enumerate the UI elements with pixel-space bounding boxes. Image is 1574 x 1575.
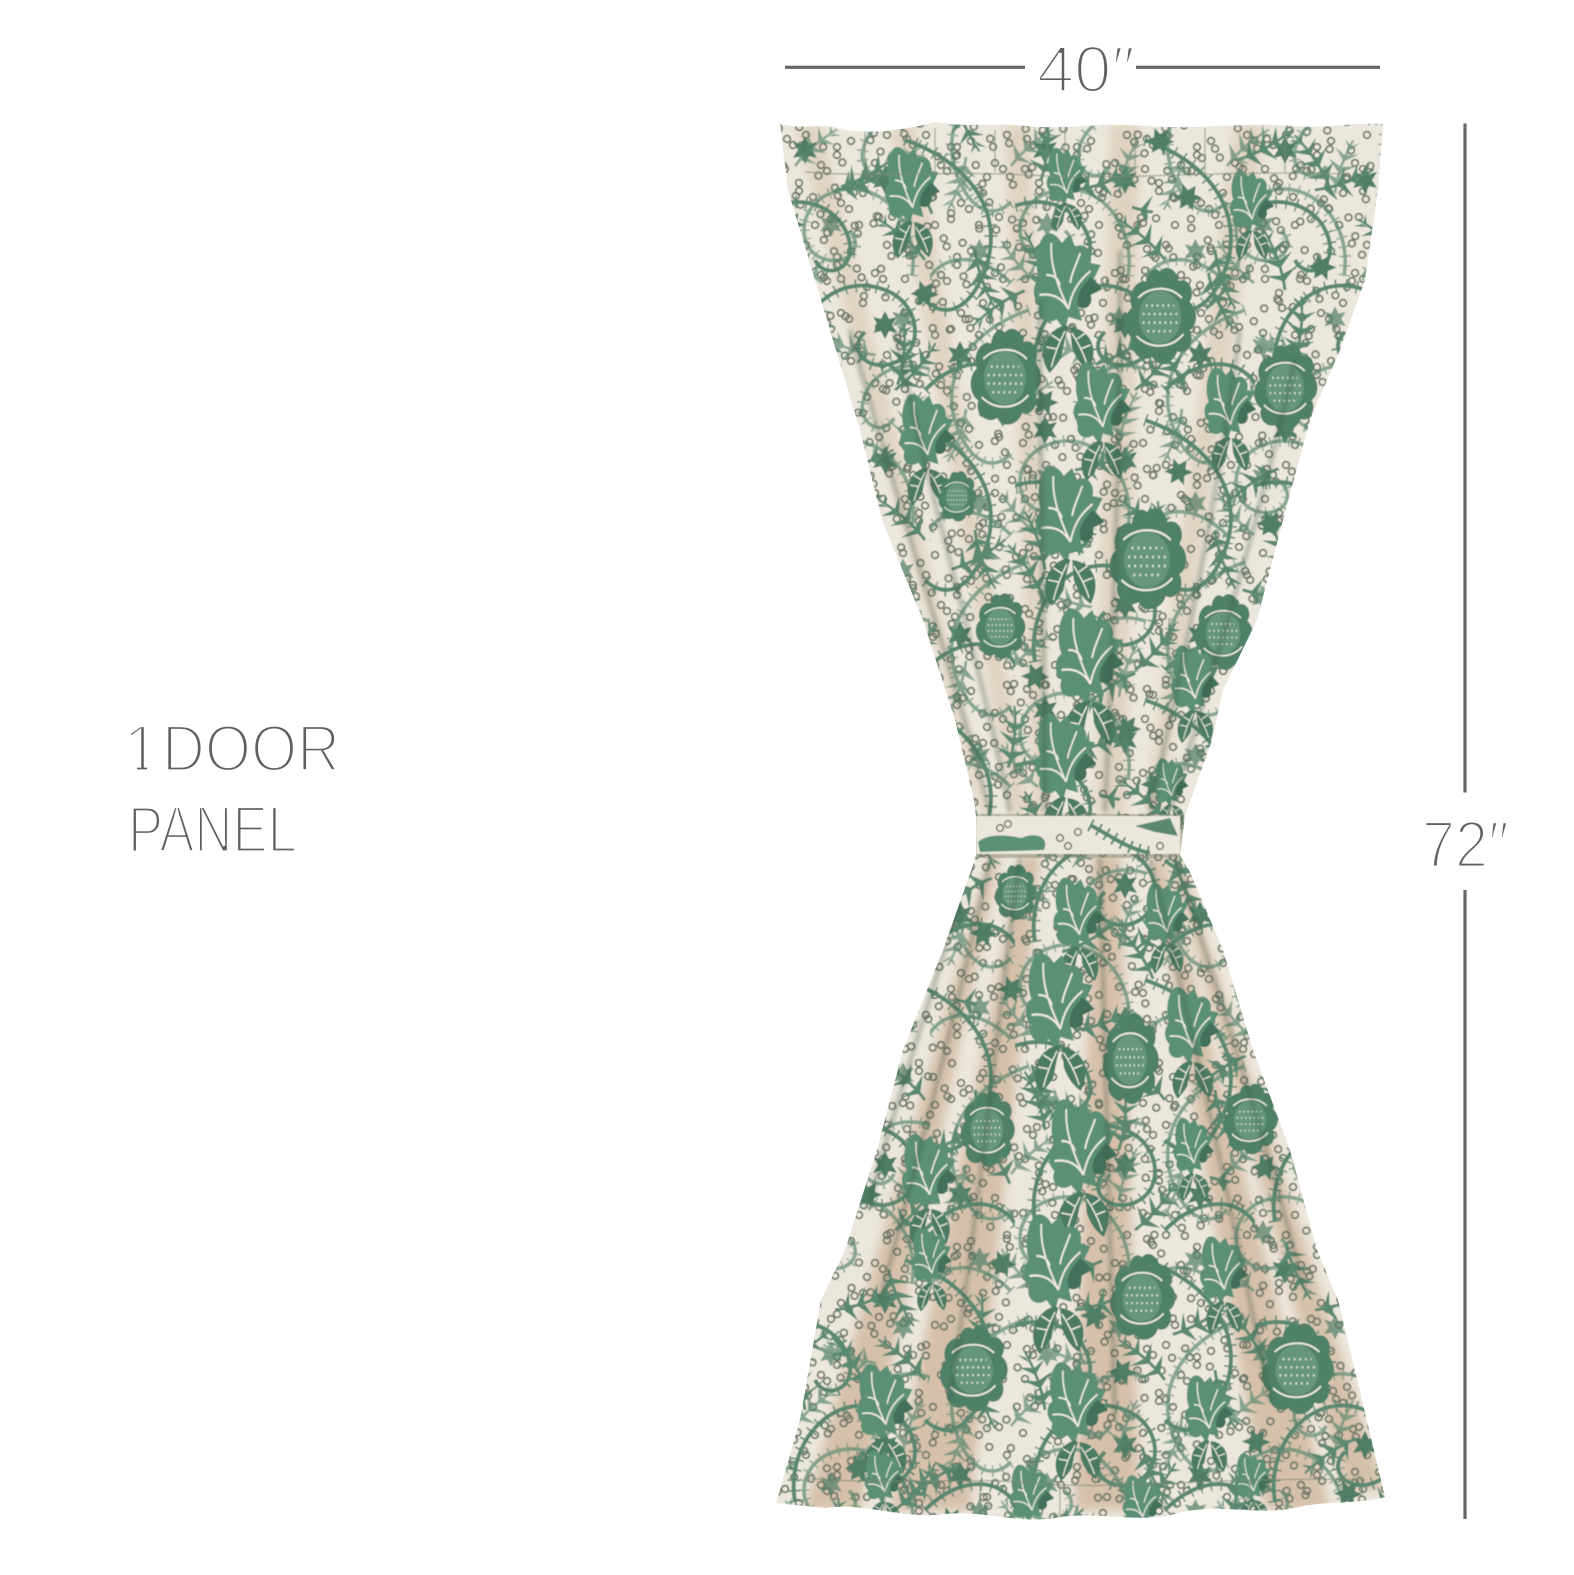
label: 1 door panel: PANEL bbox=[128, 792, 297, 866]
tieback band bbox=[972, 814, 1184, 858]
bubble print bbox=[760, 110, 1400, 1530]
pleat fold shadows bbox=[850, 250, 1305, 1420]
height dimension: 72 inches: 72″ bbox=[1422, 807, 1509, 881]
label: 1 door panel: DOOR bbox=[162, 711, 340, 785]
label: 1 door panel bbox=[130, 726, 334, 851]
tan pleat shading upper bbox=[795, 125, 1265, 816]
vine print bbox=[760, 110, 1400, 1530]
height dimension: 72 inches bbox=[1422, 124, 1509, 1519]
curtain panel bbox=[760, 110, 1400, 1552]
sprig print bbox=[795, 124, 1378, 1520]
flower print bbox=[857, 147, 1334, 1552]
label: 1 door panel: 1 bbox=[123, 711, 160, 785]
rod pocket gathers bbox=[805, 128, 1365, 1516]
width dimension: 40 inches: 40″ bbox=[1037, 32, 1135, 106]
tan pleat shading lower bbox=[805, 855, 1385, 1510]
width dimension: 40 inches bbox=[785, 32, 1380, 106]
